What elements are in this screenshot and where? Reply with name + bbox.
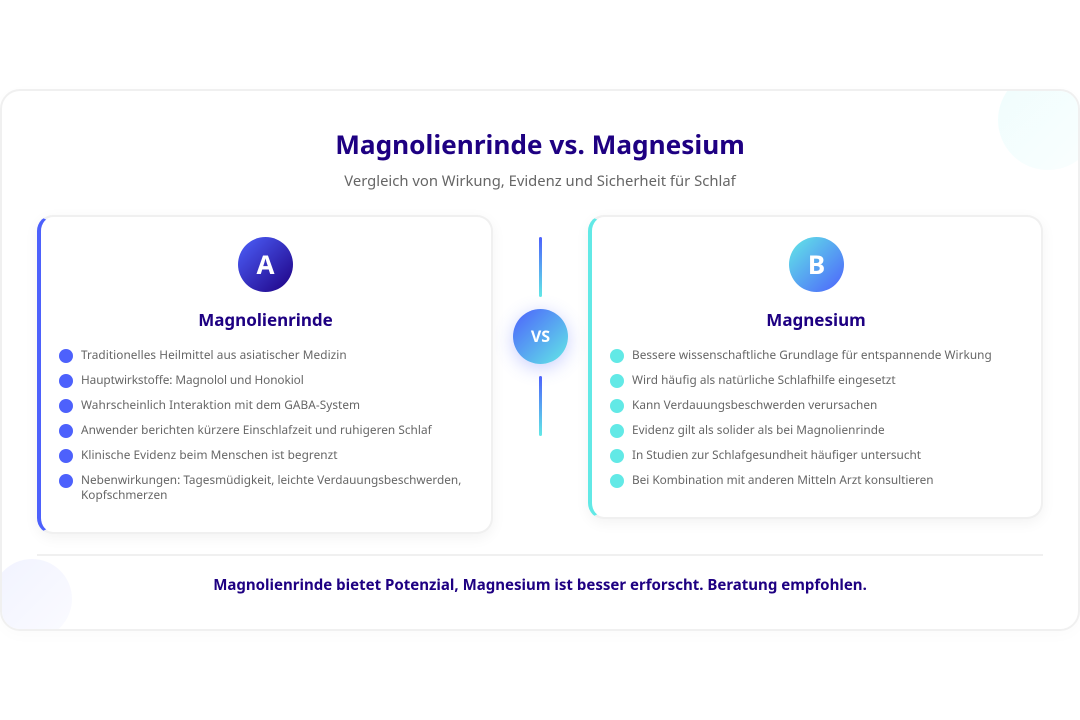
subtitle: Vergleich von Wirkung, Evidenz und Sicherheit für Schlaf: [344, 171, 736, 191]
VS badge: [513, 309, 568, 364]
badge A: [238, 237, 293, 292]
badge B: B: [808, 246, 825, 282]
heading B: Magnesium: [766, 308, 866, 331]
main panel: [0, 89, 1080, 631]
list A: Kopfschmerzen: [81, 487, 167, 503]
list B: Wird häufig als natürliche Schlafhilfe eingesetzt: [632, 372, 896, 388]
list A: Wahrscheinlich Interaktion mit dem GABA-System: [81, 397, 360, 413]
list A: Anwender berichten kürzere Einschlafzeit und ruhigeren Schlaf: [81, 422, 432, 438]
list B: [610, 347, 992, 488]
title: Magnolienrinde vs. Magnesium: [335, 126, 745, 162]
decorative circle bottom left: [0, 559, 72, 639]
panel: Magnolienrinde: [37, 215, 493, 534]
footer divider and conclusion: [37, 554, 1043, 596]
badge A: A: [256, 246, 274, 282]
badge B: [789, 237, 844, 292]
VS badge: VS: [531, 325, 550, 347]
connector line bottom: [539, 376, 542, 436]
list B: In Studien zur Schlafgesundheit häufiger untersucht: [632, 447, 921, 463]
decorative circle top right: [998, 70, 1080, 170]
list B: Evidenz gilt als solider als bei Magnolienrinde: [632, 422, 885, 438]
list A: Nebenwirkungen: Tagesmüdigkeit, leichte Verdauungsbeschwerden,: [81, 472, 461, 488]
list B: Bei Kombination mit anderen Mitteln Arzt konsultieren: [632, 472, 934, 488]
list A: Klinische Evidenz beim Menschen ist begrenzt: [81, 447, 338, 463]
panel: Magnesium: [588, 215, 1043, 519]
list A: Traditionelles Heilmittel aus asiatischer Medizin: [81, 347, 347, 363]
list B: Bessere wissenschaftliche Grundlage für entspannende Wirkung: [632, 347, 992, 363]
list A: [59, 347, 461, 503]
heading A: Magnolienrinde: [198, 308, 333, 331]
footer divider and conclusion: Magnolienrinde bietet Potenzial, Magnesium ist besser erforscht. Beratung empfohlen.: [213, 575, 867, 595]
list B: Kann Verdauungsbeschwerden verursachen: [632, 397, 877, 413]
list A: Hauptwirkstoffe: Magnolol und Honokiol: [81, 372, 304, 388]
connector line top: [539, 237, 542, 297]
